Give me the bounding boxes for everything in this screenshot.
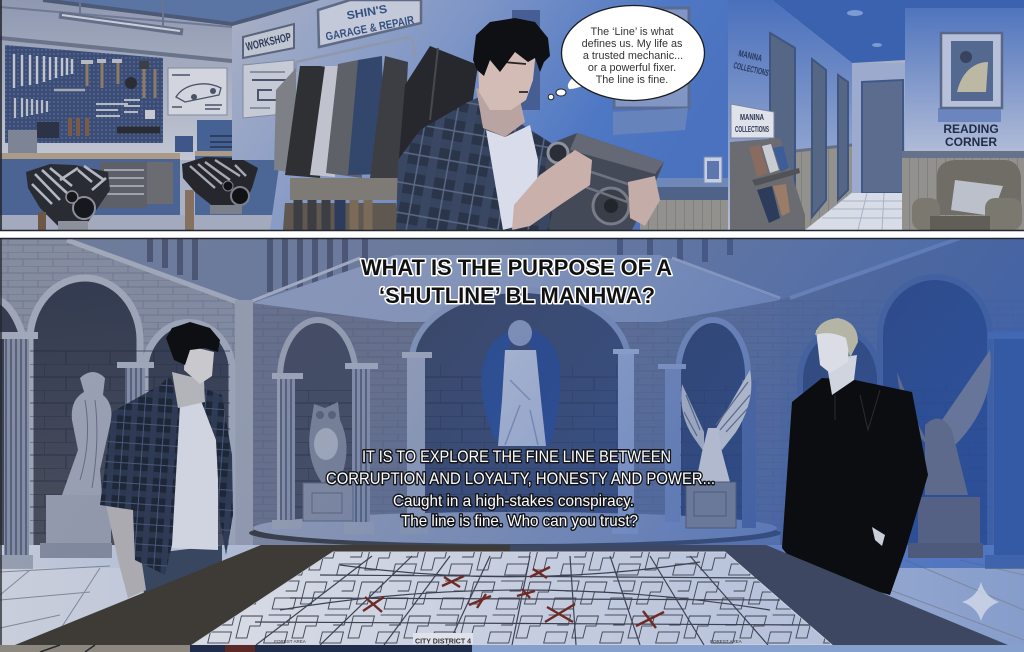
corridor end wall and ceiling (772, 0, 905, 198)
back wall frame behind bubble (512, 8, 689, 135)
lapel lines (835, 390, 880, 430)
central platform (249, 512, 781, 548)
bubble text: The ‘Line’ is what (590, 26, 674, 38)
face (816, 330, 850, 373)
statue: eagle (681, 370, 751, 528)
reading corner label (944, 124, 998, 146)
bubble text (582, 26, 683, 86)
statue: right eagle (897, 350, 991, 558)
left workshop wall (0, 0, 232, 160)
blond man in black suit (782, 318, 928, 595)
workshop sign: WORKSHOP (245, 31, 293, 54)
engine left (26, 164, 110, 230)
panel: bottom courtyard scene (0, 238, 1024, 646)
white tee (170, 398, 218, 550)
title: WHAT IS THE PURPOSE OF A (361, 255, 672, 280)
hair (166, 322, 220, 365)
explanation text (326, 447, 715, 530)
bubble text: defines us. My life as (582, 38, 683, 50)
magazine rack (730, 104, 805, 230)
neck (826, 355, 857, 395)
hair (473, 18, 550, 76)
plaid shirt (396, 98, 552, 230)
bubble text: The line is fine. (596, 74, 668, 86)
explanation text: IT IS TO EXPLORE THE FINE LINE BETWEEN (362, 447, 671, 466)
title (361, 255, 672, 308)
facial features (503, 62, 528, 92)
map streets (255, 556, 810, 645)
right wing wall (780, 240, 1024, 560)
clothes rack (274, 38, 478, 230)
table (15, 545, 1008, 645)
right wall of garage (232, 0, 735, 230)
wall lettering: Manina Collections: COLLECTIONS (733, 60, 770, 78)
counter with photo frame (640, 157, 728, 230)
corridor doors (770, 33, 848, 230)
wall trim (0, 38, 232, 61)
reading corner label: CORNER (945, 135, 997, 149)
hand in pocket (872, 527, 885, 546)
red X marks (363, 567, 664, 628)
statue: weeping angel (481, 320, 560, 446)
armchair (912, 160, 1022, 230)
statue: owl (303, 402, 353, 521)
ceiling light (59, 0, 183, 32)
center upper block (252, 255, 780, 322)
magazine rack: MANINA (740, 113, 764, 122)
magazine rack: COLLECTIONS (735, 125, 769, 134)
wall lettering: Manina Collections (734, 50, 769, 76)
map labels (413, 633, 473, 644)
wall lettering: Manina Collections: MANINA (738, 48, 764, 63)
left hand (512, 150, 592, 230)
city map: FOREST AREA (274, 639, 306, 644)
framed painting (938, 33, 1002, 122)
man with engine (396, 18, 664, 230)
arches: right wing (800, 277, 990, 560)
explanation text: Caught in a high-stakes conspiracy. (393, 493, 634, 510)
upper balcony (0, 238, 1024, 308)
reading corner wall (905, 0, 1024, 155)
engine block (545, 133, 664, 230)
corridor floor (805, 193, 902, 230)
garage sign: SHIN'S (346, 3, 389, 22)
central pillar (235, 300, 253, 560)
arches: center (280, 290, 748, 525)
brick center alcoves (282, 365, 746, 525)
neck (172, 372, 205, 408)
neck (476, 88, 525, 137)
brick right alcoves (803, 385, 988, 555)
vise and tool chest (175, 120, 232, 152)
car blueprint poster (168, 68, 227, 115)
plaid shirt (100, 375, 180, 575)
center wall (252, 300, 782, 530)
wainscot (795, 144, 852, 230)
left cornice (67, 240, 240, 303)
left arm (106, 505, 146, 598)
city map: FOREST AREA (710, 639, 742, 644)
corridor left wall (728, 0, 852, 230)
city map (192, 552, 832, 646)
panel: top garage scene (0, 0, 1024, 230)
engine right (182, 157, 258, 230)
floors (0, 545, 1024, 645)
right hand (628, 176, 660, 226)
bottom strip: next panels peeking (0, 645, 1024, 652)
bubble text: a trusted mechanic... (583, 50, 683, 62)
face (184, 345, 214, 384)
jeans (138, 545, 222, 600)
panel border (0, 0, 1024, 230)
engine diagram poster (243, 60, 294, 118)
sparkle icon (962, 582, 999, 621)
garage sign (318, 0, 421, 47)
ceiling (0, 0, 320, 27)
man in plaid shirt (100, 322, 233, 600)
title: ‘SHUTLINE’ BL MANHWA? (379, 283, 655, 308)
face (478, 50, 536, 110)
workshop sign (243, 24, 294, 58)
arches: left wing (0, 278, 232, 560)
explanation text: CORRUPTION AND LOYALTY, HONESTY AND POWER... (326, 469, 715, 488)
blue lighting overlay (0, 238, 1024, 568)
city map: CITY DISTRICT 4 (415, 636, 472, 646)
right cornice (790, 238, 960, 298)
hair (815, 318, 858, 358)
white tee (486, 125, 538, 230)
bubble text: or a powerful fixer. (588, 62, 676, 74)
explanation text: The line is fine. Who can you trust? (401, 513, 638, 530)
left wing wall (0, 240, 240, 560)
statue: robed figure (40, 372, 112, 558)
wainscot reading corner (902, 151, 1024, 230)
columns (0, 332, 1024, 569)
panel border bottom scene (0, 238, 1024, 645)
garage sign: GARAGE & REPAIR (325, 14, 416, 43)
brick left alcoves (30, 350, 230, 540)
workbench (0, 151, 290, 230)
reading corner label: READING (943, 122, 999, 136)
suit (782, 378, 928, 595)
thought bubble (548, 6, 704, 100)
pegboard with tools (5, 45, 163, 154)
